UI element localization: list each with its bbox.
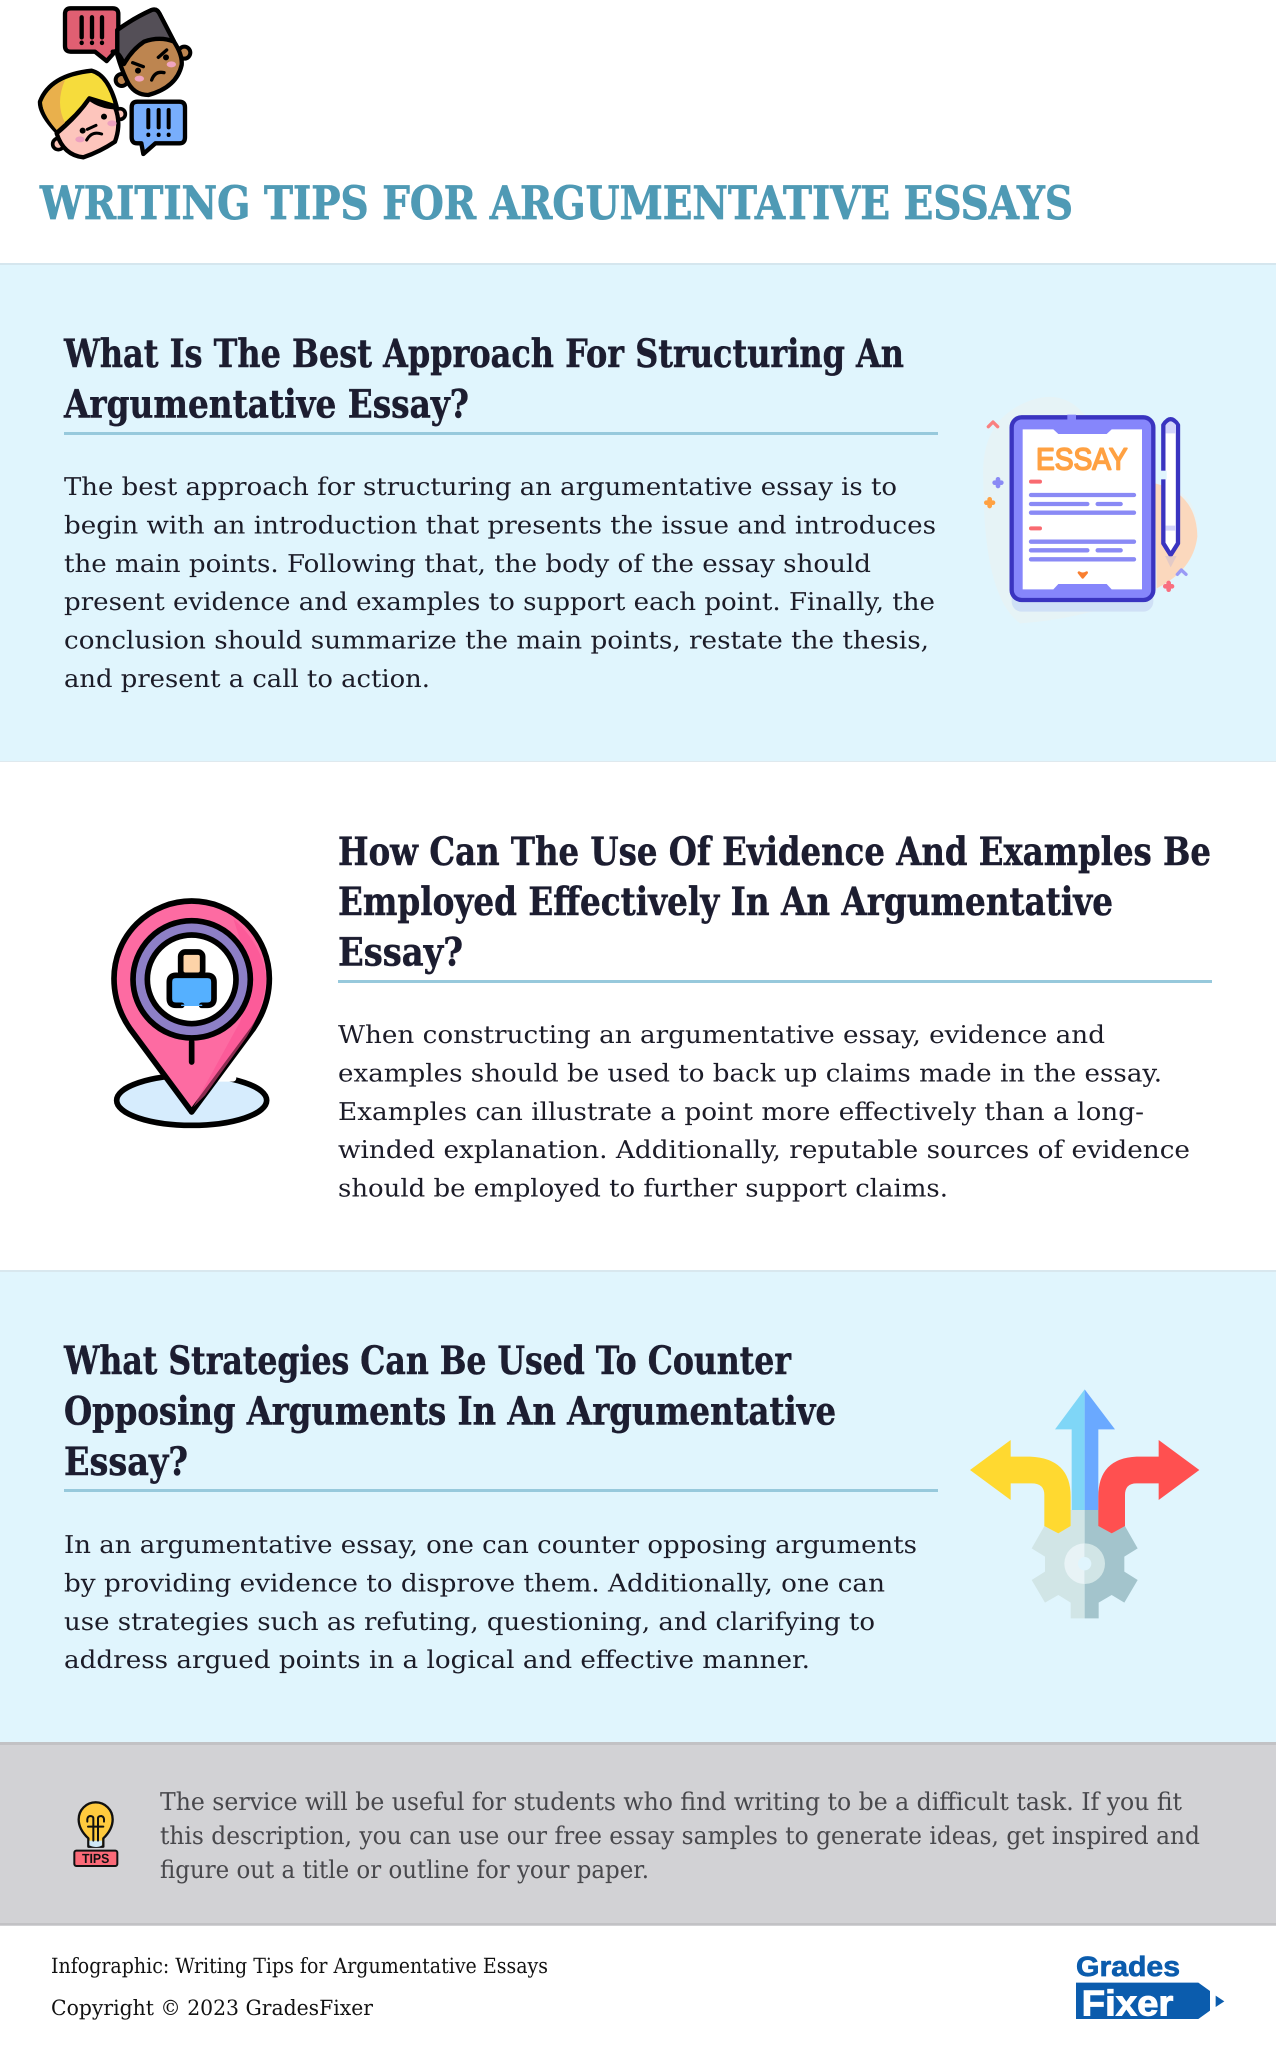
heading: counterarguments	[63, 1338, 836, 1485]
text: service note: figure out a title or outline for your paper.	[160, 1855, 649, 1884]
icon: tips light bulb	[74, 1802, 117, 1866]
text: counterarguments body	[64, 1530, 917, 1674]
icon: arguing people with speech bubbles	[40, 8, 190, 157]
text: structuring body	[64, 472, 936, 693]
text: structuring body: and present a call to action.	[64, 664, 430, 693]
panel: structuring an essay	[0, 263, 1276, 762]
text: service note	[160, 1787, 1200, 1884]
text: service note: this description, you can use our free essay samples to generate ideas, get inspired and	[160, 1821, 1200, 1850]
text: structuring body: begin with an introduction that presents the issue and introduces	[64, 510, 936, 539]
logo: GradesFixer: Grades	[1076, 1951, 1180, 1982]
heading: evidence: Essay?	[338, 930, 463, 976]
icon: essay tablet and pen	[983, 397, 1197, 623]
heading: structuring	[63, 331, 904, 428]
text: evidence body: Examples can illustrate a point more effectively than a long-	[338, 1097, 1144, 1126]
heading: counterarguments: Opposing Arguments In An Argumentative	[64, 1388, 836, 1434]
icon: essay tablet and pen: ESSAY	[1036, 442, 1128, 476]
icon: tips light bulb: TIPS	[82, 1851, 109, 1866]
text: structuring body: The best approach for structuring an argumentative essay is to	[64, 472, 897, 501]
footer: credits	[51, 1954, 548, 2020]
panel: service note	[0, 1742, 1276, 1926]
heading: evidence: Employed Effectively In An Argumentative	[338, 879, 1113, 925]
heading: evidence	[338, 829, 1211, 976]
footer: credits: Infographic: Writing Tips for Argumentative Essays	[51, 1954, 548, 1978]
logo: GradesFixer: Fixer	[1082, 1983, 1173, 2023]
icon: location pin with person	[114, 901, 269, 1125]
heading: counterarguments: Essay?	[64, 1439, 188, 1485]
icon: three arrows and gear	[970, 1389, 1199, 1618]
text: structuring body: present evidence and examples to support each point. Finally, the	[64, 587, 935, 616]
text: counterarguments body: use strategies such as refuting, questioning, and clarifying to	[64, 1607, 875, 1636]
logo: GradesFixer	[1076, 1951, 1224, 2023]
text: counterarguments body: In an argumentative essay, one can counter opposing arguments	[64, 1530, 917, 1559]
text: service note: The service will be useful for students who find writing to be a difficult task. If you fit	[160, 1787, 1182, 1816]
text: counterarguments body: by providing evidence to disprove them. Additionally, one can	[64, 1568, 885, 1597]
footer: credits: Copyright © 2023 GradesFixer	[51, 1996, 374, 2020]
text: structuring body: conclusion should summarize the main points, restate the thesis,	[64, 626, 929, 655]
title: WRITING TIPS FOR ARGUMENTATIVE ESSAYS	[39, 176, 1073, 230]
panel: evidence and examples	[114, 829, 1212, 1203]
text: evidence body	[338, 1020, 1190, 1203]
heading: structuring: What Is The Best Approach For Structuring An	[63, 331, 904, 377]
panel: countering opposing arguments	[0, 1270, 1276, 1743]
heading: structuring: Argumentative Essay?	[63, 382, 469, 428]
text: evidence body: should be employed to further support claims.	[338, 1174, 948, 1203]
text: evidence body: winded explanation. Additionally, reputable sources of evidence	[338, 1135, 1190, 1164]
text: structuring body: the main points. Following that, the body of the essay should	[64, 549, 871, 578]
heading: counterarguments: What Strategies Can Be Used To Counter	[63, 1338, 791, 1384]
text: evidence body: examples should be used to back up claims made in the essay.	[338, 1058, 1162, 1087]
text: counterarguments body: address argued points in a logical and effective manner.	[64, 1645, 810, 1674]
text: evidence body: When constructing an argumentative essay, evidence and	[338, 1020, 1105, 1049]
